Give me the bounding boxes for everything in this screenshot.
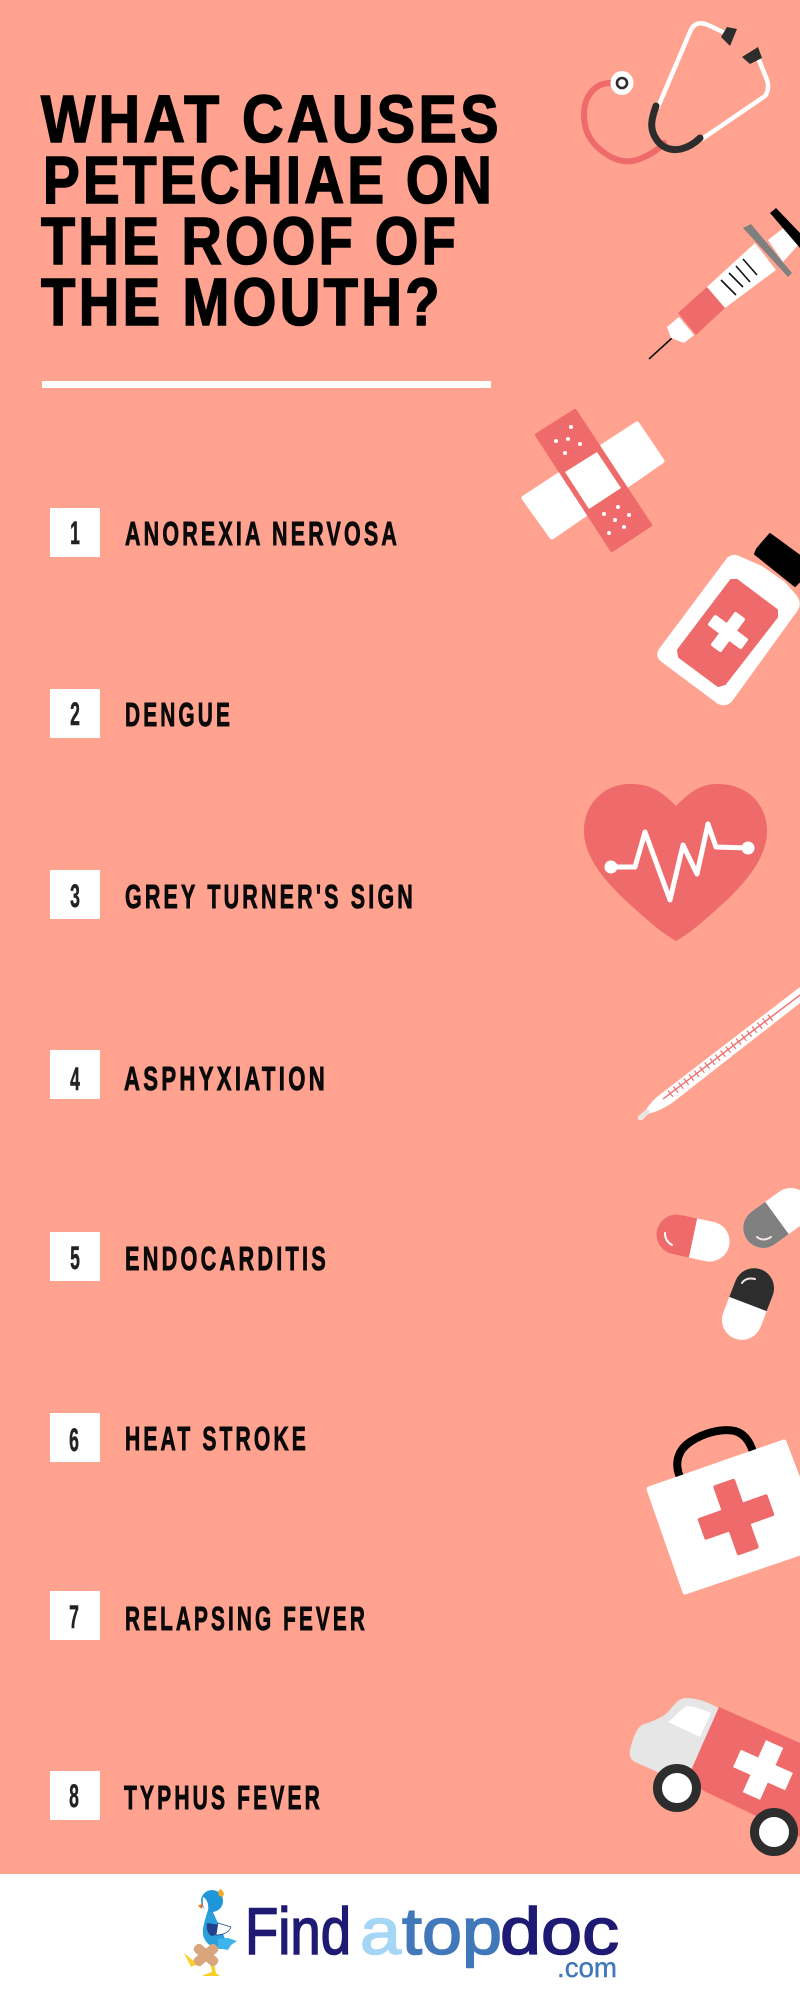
logo: wordmark: .com (557, 1952, 617, 1983)
icon: syringe (649, 208, 800, 359)
list item 6: HEAT STROKE (125, 1421, 309, 1458)
logo: wordmark: a (360, 1894, 401, 1968)
title: WHAT CAUSES (41, 82, 502, 157)
icon: heart with pulse (584, 784, 767, 941)
logo: wordmark: top (402, 1894, 502, 1968)
list item 7: RELAPSING FEVER (125, 1601, 368, 1638)
logo: wordmark: doc (500, 1894, 619, 1968)
icon: ambulance (630, 1698, 800, 1852)
list item 7: 7 (69, 1601, 79, 1635)
list item 8 (50, 1771, 323, 1820)
list item 6 (50, 1413, 309, 1462)
icon: thermometer (638, 987, 800, 1120)
list item 2: 2 (70, 698, 80, 732)
list item 5 (50, 1232, 329, 1281)
title: PETECHIAE ON (43, 143, 495, 218)
list item 7 (50, 1591, 368, 1640)
list item 5: ENDOCARDITIS (125, 1241, 329, 1278)
title: THE ROOF OF (41, 204, 459, 279)
list item 3: GREY TURNER'S SIGN (125, 879, 416, 916)
title (41, 82, 502, 340)
list item 5: 5 (70, 1242, 80, 1276)
footer band (0, 1874, 800, 2000)
list item 2 (50, 689, 233, 738)
icon: medical kit (649, 1430, 800, 1592)
list item 3: 3 (70, 880, 80, 914)
title: THE MOUTH? (41, 265, 443, 340)
list item 1 (50, 508, 400, 557)
logo: duck mascot (184, 1889, 237, 1976)
icon: pill grey (735, 1180, 800, 1256)
list item 2: DENGUE (125, 697, 233, 734)
pill black highlight (742, 1278, 755, 1283)
icon: pill black (716, 1262, 780, 1346)
list item 1: 1 (70, 517, 80, 551)
icon: stethoscope (584, 23, 768, 161)
pill grey highlight (757, 1237, 771, 1240)
list item 3 (50, 870, 416, 919)
icon: bandage (524, 411, 662, 550)
icon: pill red (653, 1211, 733, 1265)
list item 6: 6 (69, 1424, 79, 1458)
list item 4 (50, 1050, 328, 1099)
list item 1: ANOREXIA NERVOSA (125, 516, 400, 553)
list item 4: ASPHYXIATION (124, 1061, 328, 1098)
list item 8: TYPHUS FEVER (124, 1780, 323, 1817)
title underline (42, 381, 491, 388)
list item 4: 4 (70, 1063, 80, 1097)
icon: medicine bottle (657, 534, 800, 705)
logo: wordmark (245, 1894, 619, 1983)
list item 8: 8 (69, 1780, 79, 1814)
logo: wordmark: Find (245, 1894, 351, 1968)
